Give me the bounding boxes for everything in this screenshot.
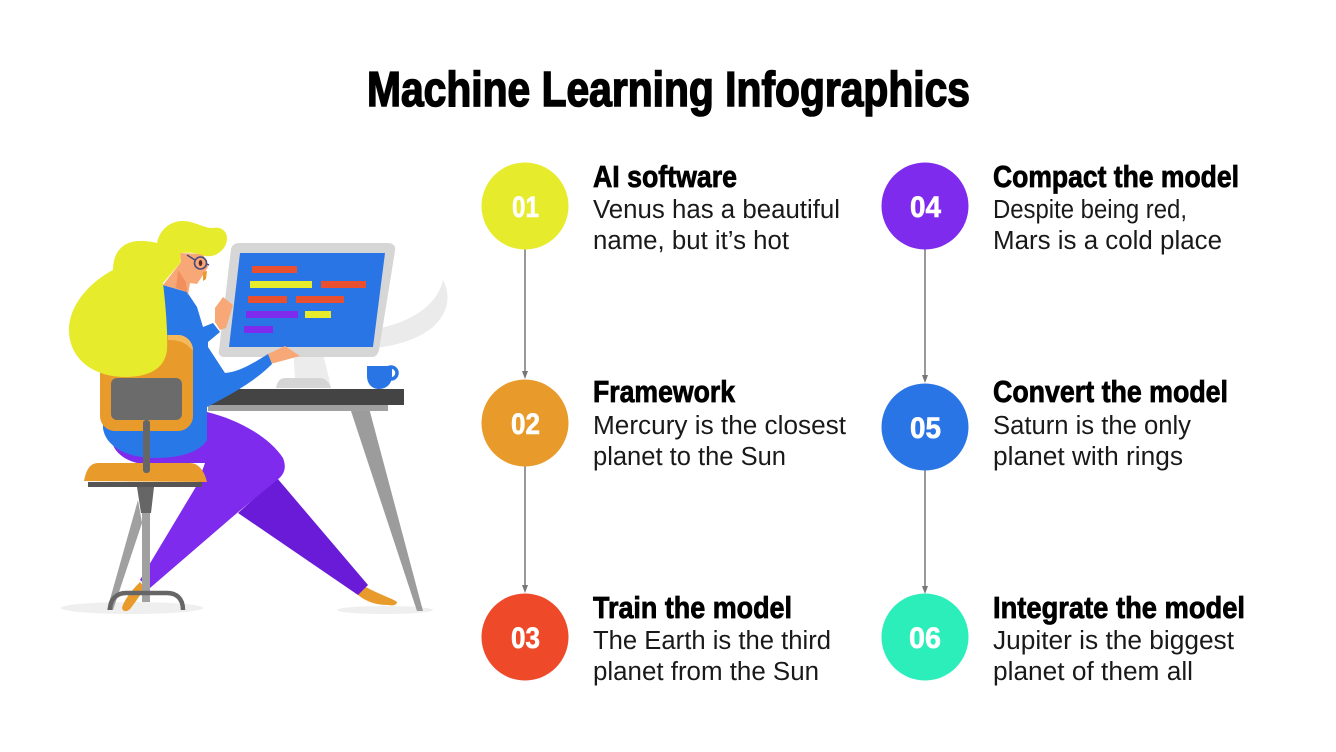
chair seat and base (84, 420, 207, 610)
step 05: Convert the model (882, 374, 1228, 471)
step 01: AI software: name, but it’s hot (593, 227, 789, 255)
step 01: AI software: 01 (512, 191, 539, 224)
illustration: person working at a computer (61, 221, 448, 614)
step 05: Convert the model: planet with rings (993, 443, 1183, 471)
connector arrow 02 to 03 (522, 466, 528, 593)
coffee cup (367, 366, 397, 389)
step 02: Framework (482, 374, 846, 471)
step 06: Integrate the model: 06 (909, 622, 941, 655)
step 03: Train the model: 03 (511, 622, 540, 655)
hair (69, 221, 227, 377)
glasses (187, 255, 209, 269)
step 03: Train the model: Train the model (593, 590, 792, 625)
connector arrow 04 to 05 (922, 249, 928, 383)
step 02: Framework: Framework (593, 374, 736, 409)
right leg and shoe (238, 478, 397, 605)
torso and arms (103, 285, 300, 458)
floor shadows (61, 602, 433, 614)
connector arrow 05 to 06 (922, 470, 928, 594)
step 06: Integrate the model: planet of them all (993, 658, 1193, 686)
step 06: Integrate the model: Integrate the model (993, 590, 1245, 625)
steam from the cup (375, 280, 448, 348)
step 04: Compact the model: Despite being red, (993, 196, 1187, 224)
desk (208, 389, 423, 611)
step 04: Compact the model: Mars is a cold place (993, 227, 1222, 255)
step 06: Integrate the model: Jupiter is the biggest (993, 627, 1234, 655)
step 05: Convert the model: Saturn is the only (993, 412, 1191, 440)
step 04: Compact the model (882, 159, 1239, 255)
connector arrow 01 to 02 (522, 249, 528, 379)
chair backrest (100, 335, 193, 431)
step 01: AI software: AI software (593, 159, 737, 194)
step 03: Train the model: planet from the Sun (593, 658, 819, 686)
computer monitor (219, 243, 395, 388)
left leg and hips (113, 412, 285, 588)
step 05: Convert the model: Convert the model (993, 374, 1228, 409)
step 01: AI software: Venus has a beautiful (593, 196, 840, 224)
code lines on the screen (244, 266, 366, 333)
step 02: Framework: 02 (511, 408, 540, 441)
step 06: Integrate the model (882, 590, 1245, 686)
neck and face (163, 253, 208, 295)
title: Machine Learning Infographics (367, 62, 970, 117)
step 04: Compact the model: 04 (910, 191, 941, 224)
left shoe (122, 582, 145, 611)
step 01: AI software (482, 159, 840, 255)
step 02: Framework: planet to the Sun (593, 443, 786, 471)
step 05: Convert the model: 05 (910, 412, 941, 445)
step 04: Compact the model: Compact the model (993, 159, 1239, 194)
step 03: Train the model (482, 590, 831, 686)
step 03: Train the model: The Earth is the third (593, 627, 831, 655)
step 02: Framework: Mercury is the closest (593, 412, 846, 440)
